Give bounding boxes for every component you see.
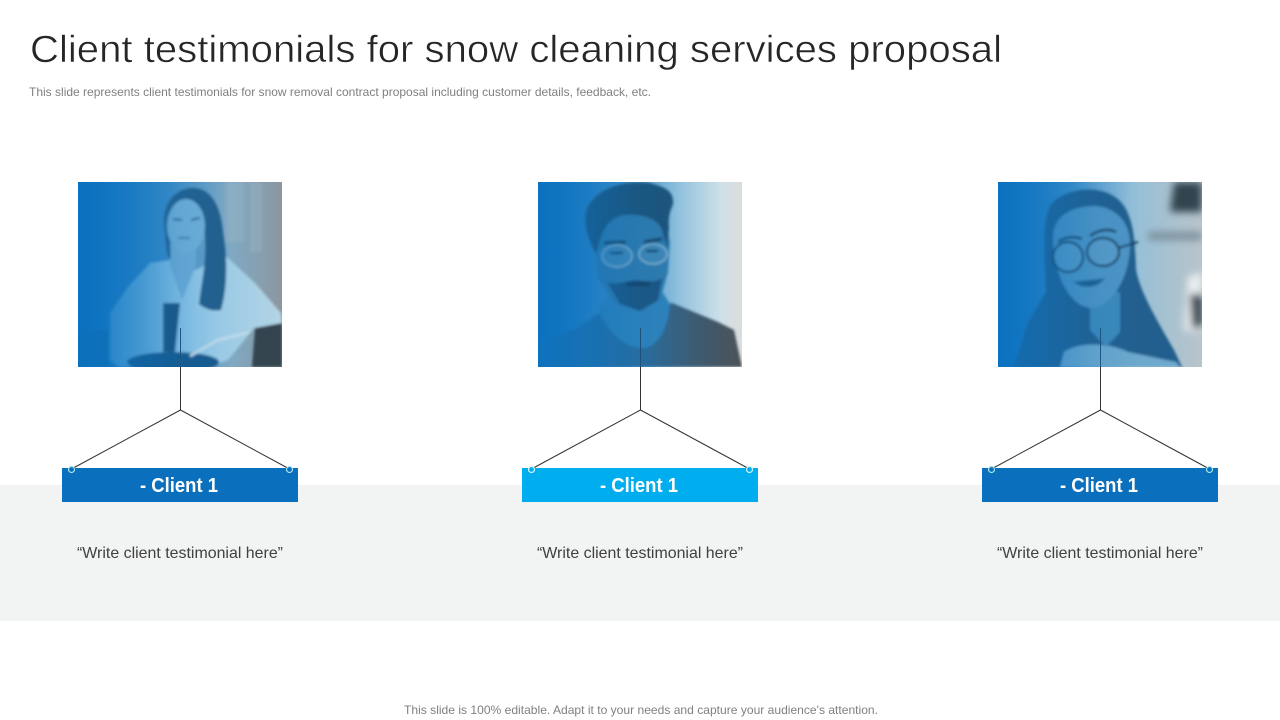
panel: client testimonial center [522, 182, 758, 562]
panel: client testimonial left [62, 182, 298, 562]
label bar: client 1 [62, 468, 298, 502]
connector dots [988, 466, 1212, 472]
photo: man with glasses and beard [538, 182, 742, 367]
label bar: client 1 [982, 468, 1218, 502]
background band [0, 485, 1280, 621]
client name: - Client 1 [140, 475, 218, 497]
panel: client testimonial right [982, 182, 1218, 562]
photo: woman in white cardigan [78, 182, 282, 372]
label bar: client 1 [522, 468, 758, 502]
subtitle: This slide represents client testimonials for snow removal contract proposal including customer details, feedback, etc. [29, 85, 651, 99]
title: Client testimonials for snow cleaning services proposal [30, 29, 1002, 71]
client name: - Client 1 [1060, 475, 1138, 497]
connector lines [992, 328, 1210, 469]
connector dots [528, 466, 752, 472]
connector lines [72, 328, 290, 469]
testimonial text: “Write client testimonial here” [997, 545, 1203, 562]
photo: woman with long hair and glasses [998, 182, 1202, 367]
footer note: This slide is 100% editable. Adapt it to your needs and capture your audience's attention. [404, 703, 878, 717]
connector dots [68, 466, 292, 472]
connector lines [532, 328, 750, 469]
testimonial text: “Write client testimonial here” [77, 545, 283, 562]
testimonial text: “Write client testimonial here” [537, 545, 743, 562]
client name: - Client 1 [600, 475, 678, 497]
